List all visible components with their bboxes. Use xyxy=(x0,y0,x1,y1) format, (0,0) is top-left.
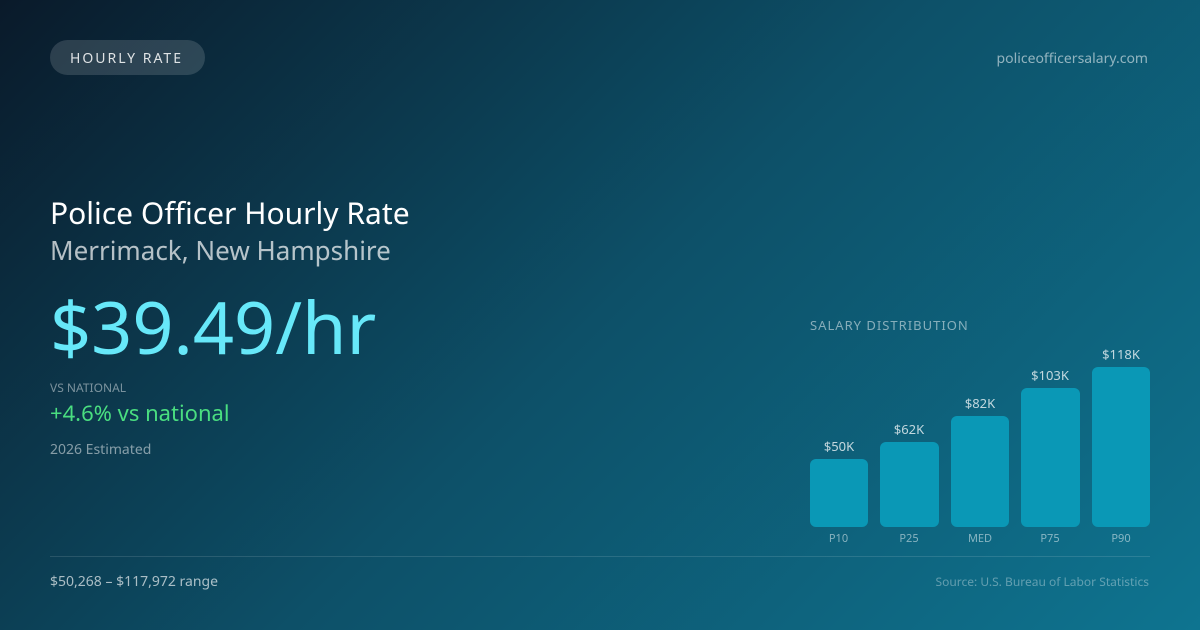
year note: 2026 Estimated xyxy=(50,440,151,459)
chart heading: SALARY DISTRIBUTION xyxy=(810,316,969,334)
bar: P10: P10 xyxy=(829,531,848,546)
bar: P25: P25 xyxy=(899,531,919,546)
bar: P75 xyxy=(1021,366,1080,546)
bar: MED: MED xyxy=(968,531,992,546)
bar: P25: $62K xyxy=(894,420,924,438)
bar: P75: P75 xyxy=(1040,531,1060,546)
chart: salary distribution xyxy=(810,316,1150,546)
bar: P25 xyxy=(880,420,939,546)
bar: P90 xyxy=(1092,345,1150,546)
bar: MED: $82K xyxy=(965,394,995,412)
bar: P10: $50K xyxy=(824,437,854,455)
badge: hourly rate: HOURLY RATE xyxy=(70,49,183,68)
bar: P90: P90 xyxy=(1111,531,1131,546)
bar: P90: $118K xyxy=(1102,345,1140,363)
source: Source: U.S. Bureau of Labor Statistics xyxy=(936,573,1149,590)
bar: P10 xyxy=(810,437,868,546)
comparison value: +4.6% vs national xyxy=(50,398,230,428)
salary range: $50,268 – $117,972 range xyxy=(50,572,218,591)
main value: $39.49/hr xyxy=(50,278,376,376)
site domain: policeofficersalary.com xyxy=(997,49,1148,68)
bar: MED xyxy=(951,394,1009,546)
title: Police Officer Hourly Rate xyxy=(50,192,410,233)
bar: P75: $103K xyxy=(1031,366,1069,384)
comparison label: VS NATIONAL xyxy=(50,379,126,396)
badge: hourly rate xyxy=(50,40,205,75)
subtitle: Merrimack, New Hampshire xyxy=(50,232,391,268)
